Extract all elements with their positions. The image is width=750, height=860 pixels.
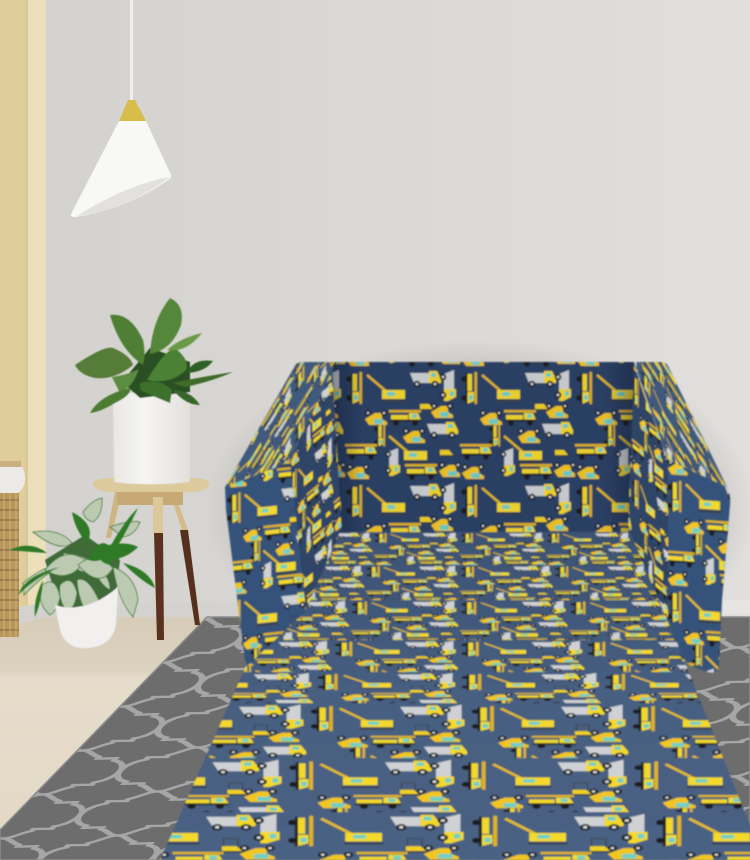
- basket: [0, 461, 25, 637]
- potted plant on table: [75, 298, 233, 484]
- wood panel: [0, 0, 46, 610]
- upper leaves: [75, 298, 233, 413]
- skirting boards: [10, 600, 750, 626]
- floor plant: [10, 498, 155, 648]
- pot on table: [113, 393, 190, 484]
- sofa: [150, 362, 750, 860]
- side table: [93, 478, 209, 640]
- left arm: [225, 362, 342, 668]
- leaf cluster shadow: [45, 535, 120, 610]
- floor: [0, 617, 750, 860]
- fold-out mattress: [150, 530, 750, 860]
- pendant lamp: [71, 0, 171, 217]
- wall background: [0, 0, 750, 620]
- floor pot: [55, 587, 118, 648]
- rug: [0, 617, 750, 860]
- shadow behind sofa: [205, 340, 750, 680]
- variegated leaves: [23, 498, 140, 617]
- sofa back: [332, 362, 636, 540]
- solid green leaves: [10, 508, 155, 617]
- right arm: [628, 362, 730, 673]
